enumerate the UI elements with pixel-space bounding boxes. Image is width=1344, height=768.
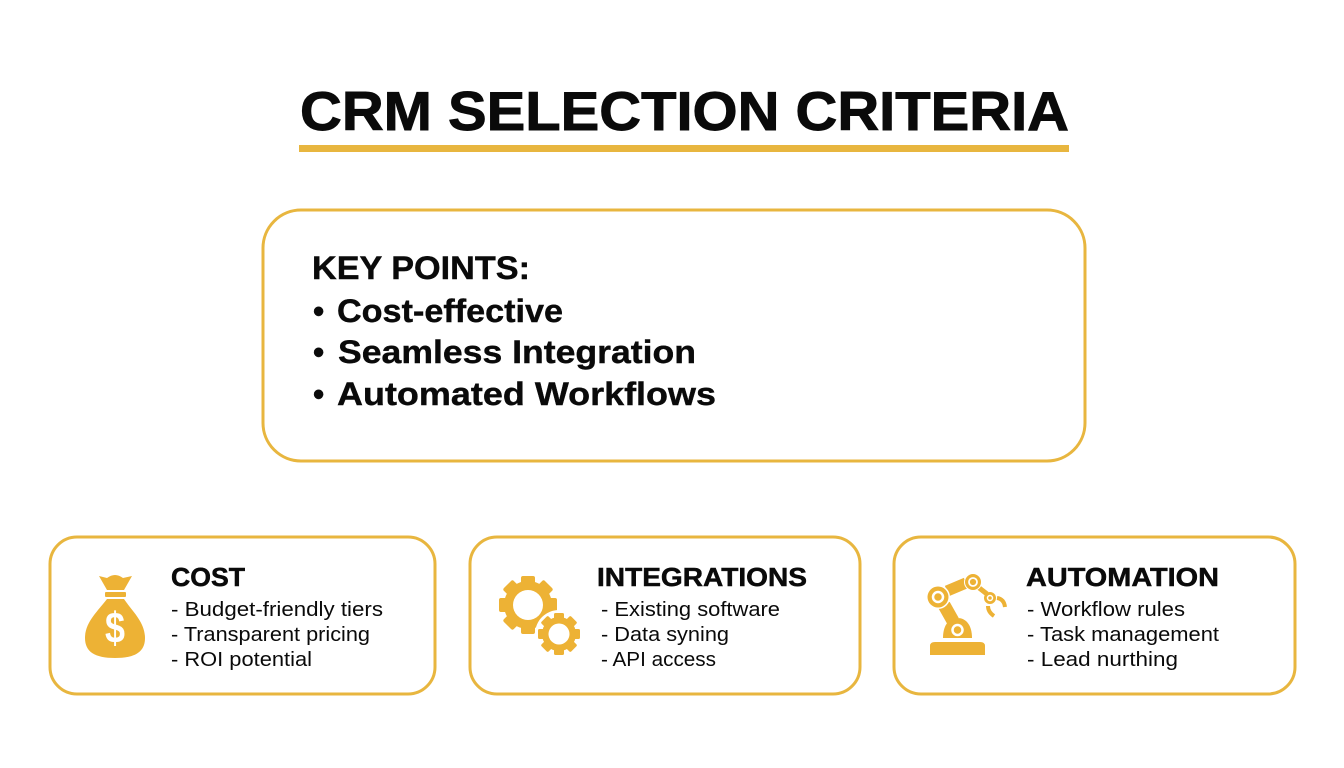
text: key points list: Seamless Integration [338, 334, 696, 370]
heading: cost: COST [171, 562, 245, 592]
text: cost details: - Budget-friendly tiers [171, 599, 383, 621]
text: key points list [312, 250, 716, 412]
text: integrations details: - Data syning [601, 624, 729, 646]
text: automation details: - Workflow rules [1027, 599, 1185, 621]
panel: automation [894, 537, 1295, 694]
text: automation details: - Lead nurthing [1027, 649, 1178, 671]
text: cost details: - Transparent pricing [171, 624, 370, 646]
panel: cost [50, 537, 435, 694]
icon: gears [499, 576, 583, 658]
text: cost details [171, 599, 383, 671]
text: integrations details [601, 599, 780, 671]
title: CRM SELECTION CRITERIA [300, 80, 1069, 142]
text: key points list: KEY POINTS: [312, 250, 530, 286]
panel: integrations [470, 537, 860, 694]
text: automation details: - Task management [1027, 624, 1219, 646]
text: automation details [1027, 599, 1219, 671]
text: key points list: • [313, 376, 324, 412]
text: key points list: • [313, 293, 324, 329]
text: key points list: Cost-effective [337, 293, 563, 329]
text: integrations details: - Existing software [601, 599, 780, 621]
icon: money bag [85, 575, 145, 658]
text: key points list: • [313, 334, 324, 370]
icon: money bag: $ [105, 604, 125, 653]
heading: automation: AUTOMATION [1026, 562, 1219, 592]
text: key points list: Automated Workflows [337, 376, 716, 412]
text: cost details: - ROI potential [171, 649, 312, 671]
heading: integrations: INTEGRATIONS [597, 562, 807, 592]
icon: robot arm [926, 573, 1005, 655]
text: integrations details: - API access [601, 649, 716, 671]
panel: key points [263, 210, 1085, 461]
